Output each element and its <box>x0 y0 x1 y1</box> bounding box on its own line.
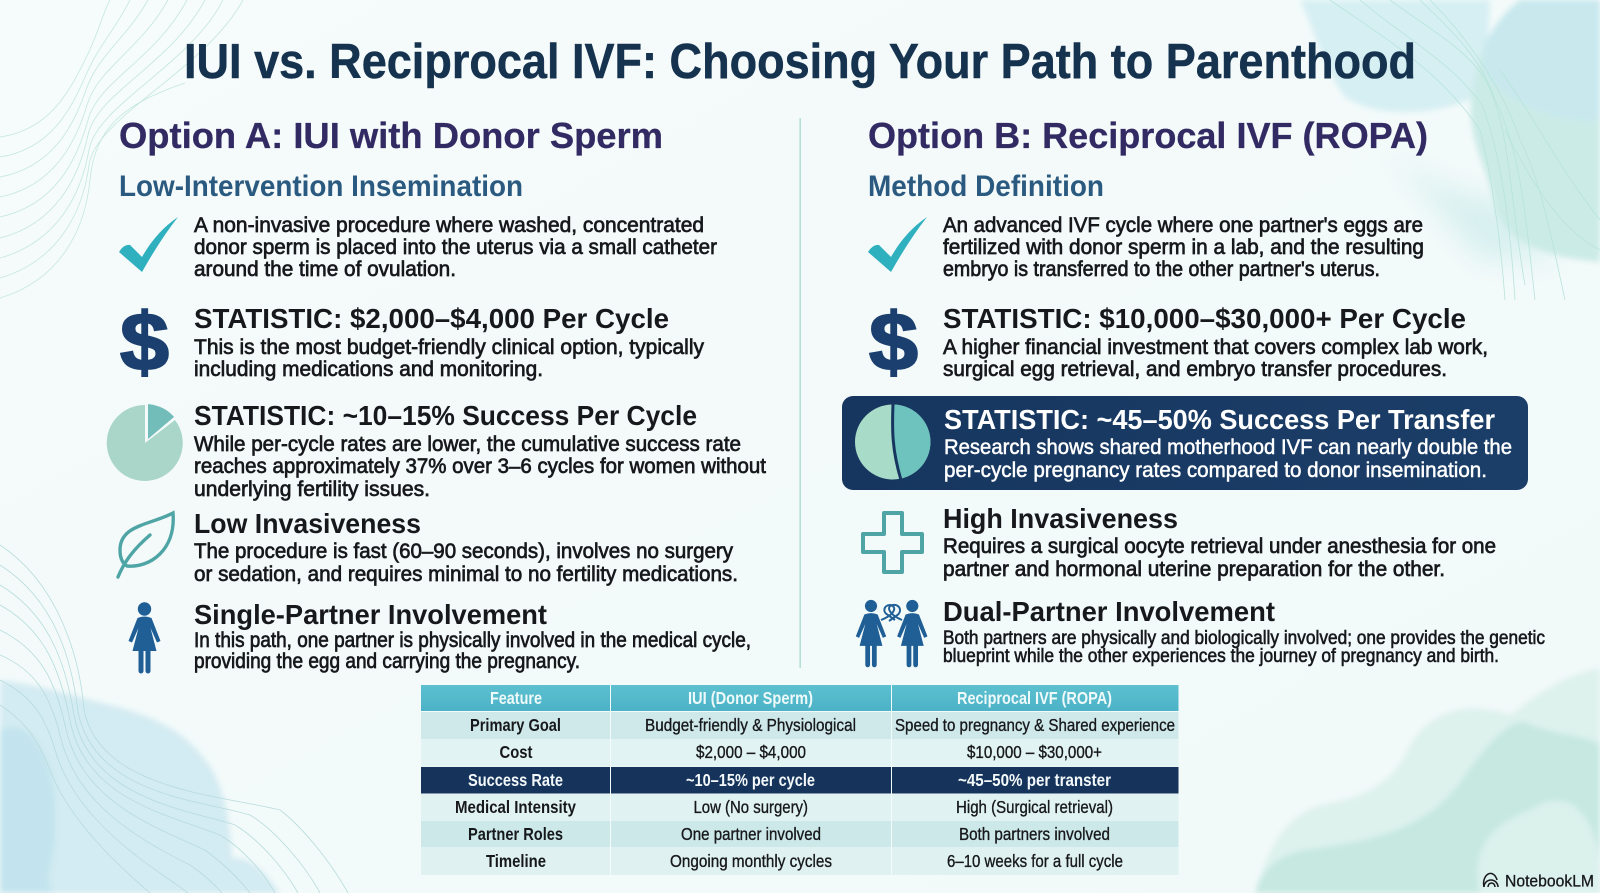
single-partner involvement: Single-Partner Involvement <box>194 599 547 630</box>
icon: NotebookLM logo <box>1484 873 1498 887</box>
row: timeline: 6–10 weeks for a full cycle <box>947 851 1123 871</box>
heading: option A: Option A: IUI with Donor Sperm <box>119 115 663 156</box>
statistic text: STATISTIC: ~45–50% Success Per Transfer <box>944 404 1495 435</box>
table header row: IUI (Donor Sperm) <box>688 688 813 708</box>
statistic text: Research shows shared motherhood IVF can nearly double the <box>944 435 1512 459</box>
row: primary goal: Speed to pregnancy & Shared experience <box>895 715 1175 735</box>
row: partner roles: Partner Roles <box>468 824 563 844</box>
statistic: cost: This is the most budget-friendly clinical option, typically <box>194 335 704 359</box>
row: medical intensity: Medical Intensity <box>455 797 576 817</box>
row: success rate highlighted: ~10–15% per cycle <box>686 770 815 790</box>
statistic: cost: STATISTIC: $2,000–$4,000 Per Cycle <box>194 303 669 334</box>
dual-partner involvement: Dual-Partner Involvement <box>943 596 1275 627</box>
low invasiveness: Low Invasiveness <box>194 508 421 539</box>
statistic: cost: A higher financial investment that covers complex lab work, <box>943 335 1488 359</box>
row: success rate highlighted <box>421 767 1178 794</box>
row: success rate highlighted: Success Rate <box>468 770 563 790</box>
row: cost: $2,000 – $4,000 <box>696 742 806 762</box>
text block: definition: A non-invasive procedure where washed, concentrated <box>194 213 704 237</box>
subheading: method definition: Method Definition <box>868 170 1104 203</box>
table header row <box>421 685 1178 711</box>
statistic text <box>944 404 1512 482</box>
icon: medical cross <box>863 513 922 572</box>
panel: option B <box>842 115 1545 667</box>
statistic: success: underlying fertility issues. <box>194 477 430 501</box>
row: timeline: Timeline <box>486 851 546 871</box>
single-partner involvement: In this path, one partner is physically involved in the medical cycle, <box>194 628 751 652</box>
table header row: Reciprocal IVF (ROPA) <box>957 688 1112 708</box>
table header row: Feature <box>490 688 542 708</box>
icon: pie chart 45-50% <box>855 404 930 480</box>
subheading: low-intervention insemination: Low-Intervention Insemination <box>119 170 523 203</box>
row: cost: $10,000 – $30,000+ <box>967 742 1102 762</box>
text block: definition: donor sperm is placed into the uterus via a small catheter <box>194 235 717 259</box>
row: primary goal <box>421 712 1178 739</box>
statistic text: per-cycle pregnancy rates compared to donor insemination. <box>944 458 1487 482</box>
text block: definition <box>194 213 717 281</box>
row: partner roles: One partner involved <box>681 824 821 844</box>
single-partner involvement <box>194 599 751 673</box>
text block: definition: fertilized with donor sperm in a lab, and the resulting <box>943 235 1424 259</box>
icon: pie chart 10-15% <box>107 404 183 481</box>
icon: check mark <box>119 217 178 272</box>
icon: woman <box>128 602 160 674</box>
text block: definition: An advanced IVF cycle where one partner's eggs are <box>943 213 1423 237</box>
statistic: cost <box>943 303 1488 381</box>
icon: two women with linked hearts <box>856 600 928 667</box>
statistic: success: While per-cycle rates are lower, the cumulative success rate <box>194 432 741 456</box>
row: medical intensity: High (Surgical retrieval) <box>956 797 1113 817</box>
icon: leaf <box>118 513 173 577</box>
statistic: success: reaches approximately 37% over 3–6 cycles for women without <box>194 454 766 478</box>
text block: definition: embryo is transferred to the other partner's uterus. <box>943 257 1380 281</box>
single-partner involvement: providing the egg and carrying the pregnancy. <box>194 649 580 673</box>
row: cost: Cost <box>500 742 533 762</box>
row: cost <box>421 739 1178 766</box>
statistic: success <box>194 400 766 501</box>
high invasiveness <box>943 503 1496 581</box>
row: medical intensity <box>421 794 1178 821</box>
row: primary goal: Primary Goal <box>470 715 561 735</box>
comparison table <box>421 685 1178 875</box>
row: primary goal: Budget-friendly & Physiological <box>645 715 856 735</box>
panel: option A <box>107 115 766 674</box>
row: timeline: Ongoing monthly cycles <box>670 851 832 871</box>
high invasiveness: Requires a surgical oocyte retrieval under anesthesia for one <box>943 534 1496 558</box>
icon: dollar sign: $ <box>869 297 918 388</box>
icon: check mark <box>868 217 927 272</box>
row: medical intensity: Low (No surgery) <box>694 797 808 817</box>
heading: option B: Option B: Reciprocal IVF (ROPA) <box>868 115 1428 156</box>
statistic: success: STATISTIC: ~10–15% Success Per Cycle <box>194 400 697 431</box>
icon: dollar sign: $ <box>120 297 169 388</box>
high invasiveness: partner and hormonal uterine preparation for the other. <box>943 557 1445 581</box>
callout: highlighted success statistic <box>842 396 1528 490</box>
row: partner roles: Both partners involved <box>959 824 1110 844</box>
statistic: cost: including medications and monitoring. <box>194 357 543 381</box>
row: success rate highlighted: ~45–50% per transter <box>958 770 1111 790</box>
dual-partner involvement: blueprint while the other experiences the journey of pregnancy and birth. <box>943 645 1499 667</box>
row: timeline <box>421 847 1178 875</box>
dual-partner involvement <box>943 596 1545 667</box>
low invasiveness: or sedation, and requires minimal to no fertility medications. <box>194 562 738 586</box>
row: partner roles <box>421 821 1178 847</box>
text block: definition <box>943 213 1424 281</box>
NotebookLM watermark: NotebookLM <box>1505 872 1594 890</box>
center divider <box>800 118 801 668</box>
statistic: cost: surgical egg retrieval, and embryo transfer procedures. <box>943 357 1447 381</box>
title: IUI vs. Reciprocal IVF: Choosing Your Path to Parenthood <box>184 35 1416 89</box>
low invasiveness <box>194 508 738 586</box>
statistic: cost: STATISTIC: $10,000–$30,000+ Per Cycle <box>943 303 1466 334</box>
text block: definition: around the time of ovulation. <box>194 257 456 281</box>
high invasiveness: High Invasiveness <box>943 503 1178 534</box>
low invasiveness: The procedure is fast (60–90 seconds), involves no surgery <box>194 539 733 563</box>
statistic: cost <box>194 303 704 381</box>
